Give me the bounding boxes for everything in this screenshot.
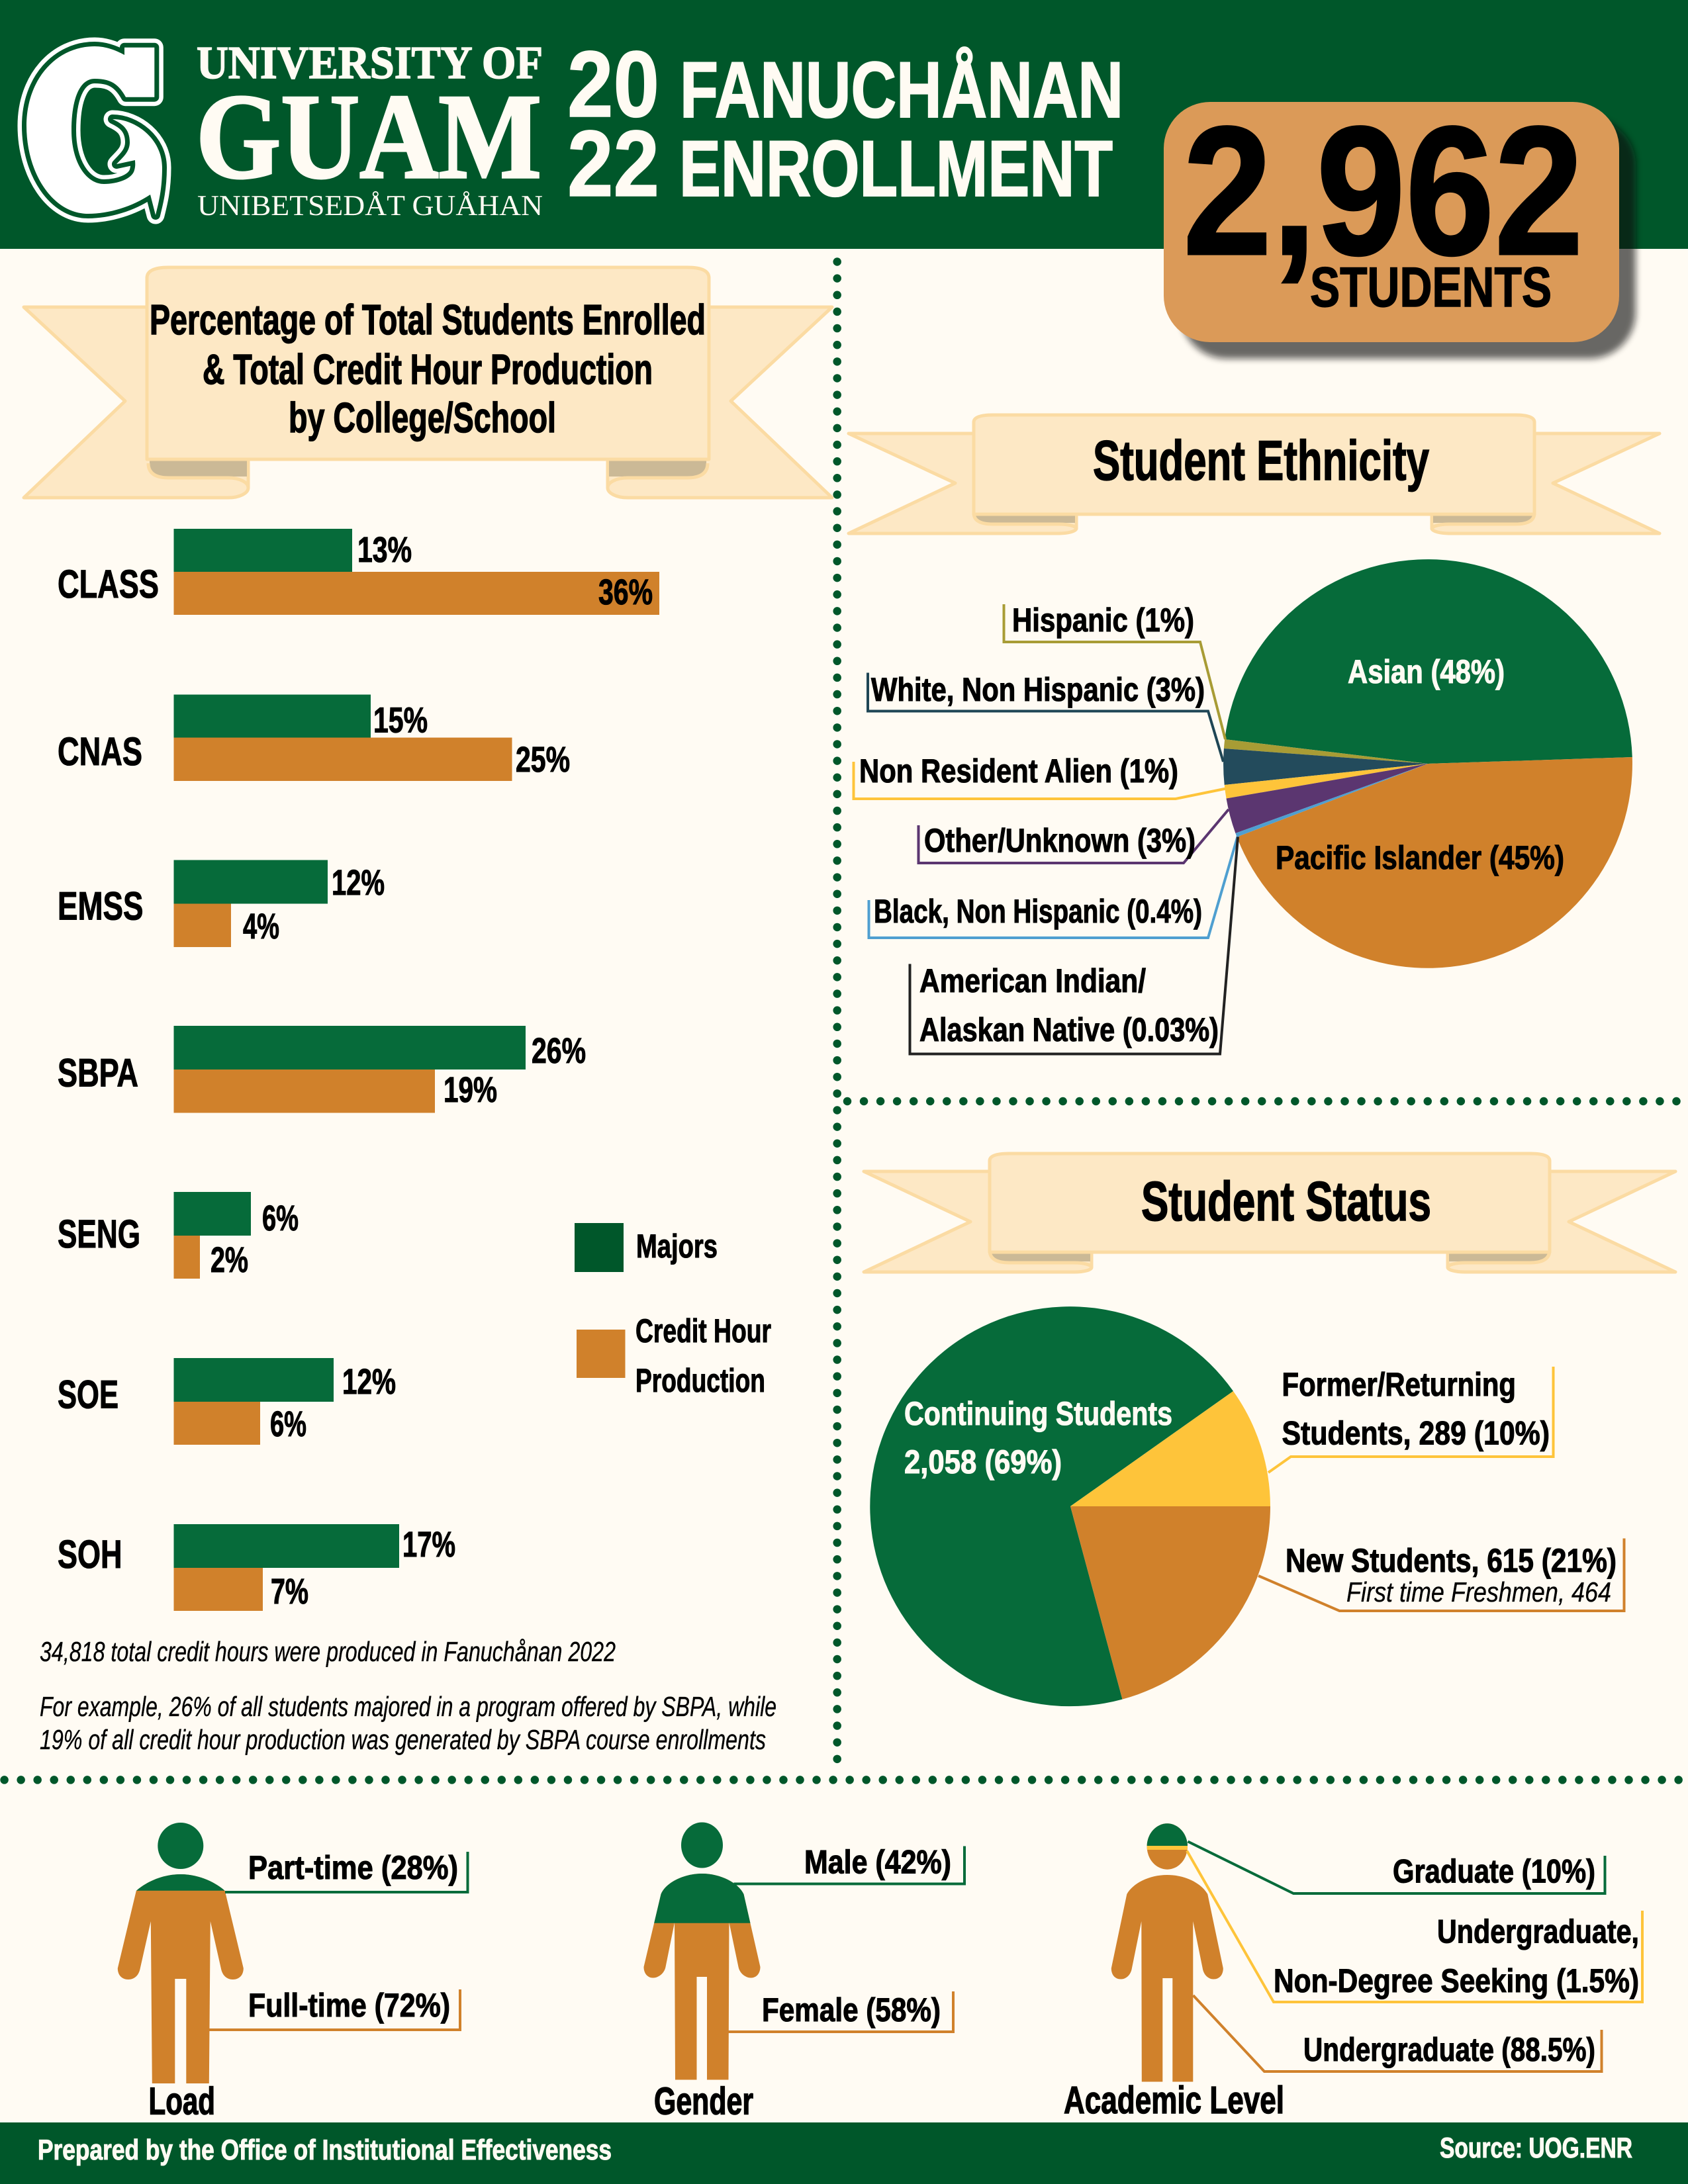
row: SOH <box>58 1524 455 1612</box>
row: SBPA: 26% <box>532 1031 586 1071</box>
title: FANUCHÅNAN <box>680 46 1123 134</box>
footer: Prepared by the Office of Institutional Effectiveness <box>38 2134 612 2166</box>
notes <box>40 1636 776 1755</box>
callout: Hispanic <box>1004 602 1225 739</box>
row: EMSS: EMSS <box>58 884 143 928</box>
callout: male <box>733 1844 964 1884</box>
callout: Black, Non Hispanic <box>868 835 1238 938</box>
logo wordmark: GUAM <box>196 69 541 204</box>
footer: Source: UOG.ENR <box>1440 2132 1632 2164</box>
banner: college heading: Percentage of Total Students Enrolled <box>150 296 706 343</box>
banner: student status: Student Status <box>1141 1170 1431 1232</box>
label: Asian: Asian (48%) <box>1348 653 1505 690</box>
callout: American Indian: Alaskan Native (0.03%) <box>919 1011 1219 1048</box>
callout: former/returning students: Former/Returning <box>1282 1366 1516 1403</box>
row: CLASS: CLASS <box>58 562 159 606</box>
callout: Black, Non Hispanic: Black, Non Hispanic (0.4%) <box>874 893 1202 930</box>
row: CNAS: 15% <box>373 700 428 740</box>
banner: college heading: by College/School <box>289 394 556 441</box>
row: SENG: SENG <box>58 1212 140 1256</box>
callout: full-time: Full-time (72%) <box>248 1987 450 2024</box>
row: CNAS <box>58 695 570 781</box>
row: CLASS: 36% <box>598 572 653 612</box>
callout: White, Non Hispanic <box>868 671 1223 762</box>
banner: student status <box>864 1154 1675 1272</box>
row: EMSS <box>58 860 385 947</box>
label: figure caption Load: Load <box>148 2079 215 2123</box>
callout: total students: 2,962 <box>1183 88 1583 293</box>
banner: student ethnicity <box>849 415 1660 533</box>
row: SOH: SOH <box>58 1532 122 1576</box>
label: figure caption Academic Level: Academic Level <box>1064 2079 1284 2122</box>
callout: former/returning students <box>1268 1366 1553 1473</box>
callout: female: Female (58%) <box>762 1991 941 2028</box>
logo wordmark: UNIBETSEDÅT GUÅHAN <box>197 189 543 222</box>
callout: Other/Unknown: Other/Unknown (3%) <box>924 822 1196 859</box>
callout: undergraduate non-degree: Undergraduate, <box>1437 1913 1639 1950</box>
row: CNAS: 25% <box>516 740 570 780</box>
row: EMSS: 4% <box>243 907 279 946</box>
bar chart: majors and credit hours by college <box>58 529 659 1612</box>
header band <box>0 0 1688 249</box>
legend: Credit Hour <box>635 1312 771 1349</box>
banner: student ethnicity: Student Ethnicity <box>1093 430 1429 492</box>
row: CNAS: CNAS <box>58 729 142 774</box>
row: SOE <box>58 1358 396 1445</box>
banner: college heading: & Total Credit Hour Production <box>203 345 653 393</box>
callout: total students: STUDENTS <box>1310 256 1552 319</box>
row: SOH: 17% <box>402 1525 455 1565</box>
row: SENG <box>58 1192 299 1280</box>
row: SOE: SOE <box>58 1373 118 1416</box>
legend <box>575 1223 771 1399</box>
row: CLASS <box>58 529 659 615</box>
callout: undergraduate non-degree <box>1187 1850 1642 2002</box>
label: continuing students: Continuing Students <box>904 1395 1172 1432</box>
callout: American Indian <box>910 837 1238 1054</box>
callout: male: Male (42%) <box>804 1844 951 1881</box>
pie chart: student status <box>870 1306 1270 1706</box>
callout: former/returning students: Students, 289 (10%) <box>1282 1415 1550 1452</box>
callout: Non Resident Alien: Non Resident Alien (1%) <box>859 752 1178 790</box>
callout: undergraduate: Undergraduate (88.5%) <box>1303 2031 1595 2068</box>
callout: part-time: Part-time (28%) <box>248 1849 458 1886</box>
legend: Production <box>635 1362 765 1399</box>
row: SOE: 6% <box>270 1404 306 1444</box>
row: SBPA: SBPA <box>58 1051 138 1095</box>
figure: load <box>118 1823 244 2123</box>
row: SBPA <box>58 1026 586 1113</box>
callout: Hispanic: Hispanic (1%) <box>1012 602 1194 639</box>
callout: new students: First time Freshmen, 464 <box>1346 1576 1611 1608</box>
callout: graduate: Graduate (10%) <box>1393 1853 1595 1890</box>
logo wordmark: UNIVERSITY OF <box>197 38 543 89</box>
logo: G mark <box>26 46 162 215</box>
row: SENG: 2% <box>211 1240 248 1280</box>
notes: For example, 26% of all students majored in a program offered by SBPA, while <box>40 1691 776 1722</box>
label: figure caption Gender: Gender <box>654 2079 753 2123</box>
callout: undergraduate <box>1193 1995 1602 2071</box>
row: SOE: 12% <box>342 1362 396 1402</box>
callout: new students <box>1258 1538 1624 1611</box>
row: EMSS: 12% <box>332 863 385 903</box>
title: 20 <box>567 32 659 137</box>
title: ENROLLMENT <box>679 124 1113 213</box>
footer <box>0 2122 1688 2184</box>
notes: 19% of all credit hour production was generated by SBPA course enrollments <box>40 1724 766 1755</box>
label: continuing students: 2,058 (69%) <box>904 1443 1062 1480</box>
label: Pacific Islander: Pacific Islander (45%) <box>1276 839 1564 876</box>
figure: academic level <box>1064 1823 1284 2122</box>
callout: graduate <box>1188 1841 1605 1893</box>
notes: 34,818 total credit hours were produced in Fanuchånan 2022 <box>40 1636 616 1667</box>
title: 22 <box>567 111 659 216</box>
banner: college heading <box>24 267 832 498</box>
callout: White, Non Hispanic: White, Non Hispanic (3%) <box>871 671 1205 708</box>
logo wordmark <box>196 38 543 222</box>
legend: Majors <box>636 1228 718 1265</box>
row: CLASS: 13% <box>357 530 412 570</box>
row: SBPA: 19% <box>444 1070 497 1110</box>
callout: Other/Unknown <box>919 809 1229 863</box>
pie chart: ethnicity <box>1223 559 1632 968</box>
callout: American Indian: American Indian/ <box>919 962 1146 999</box>
row: SENG: 6% <box>262 1199 299 1238</box>
row: SOH: 7% <box>271 1572 308 1612</box>
label: continuing students <box>904 1395 1172 1480</box>
callout: full-time <box>209 1987 460 2030</box>
title <box>567 32 1123 216</box>
figure: gender <box>643 1823 760 2123</box>
callout: new students: New Students, 615 (21%) <box>1286 1542 1617 1579</box>
